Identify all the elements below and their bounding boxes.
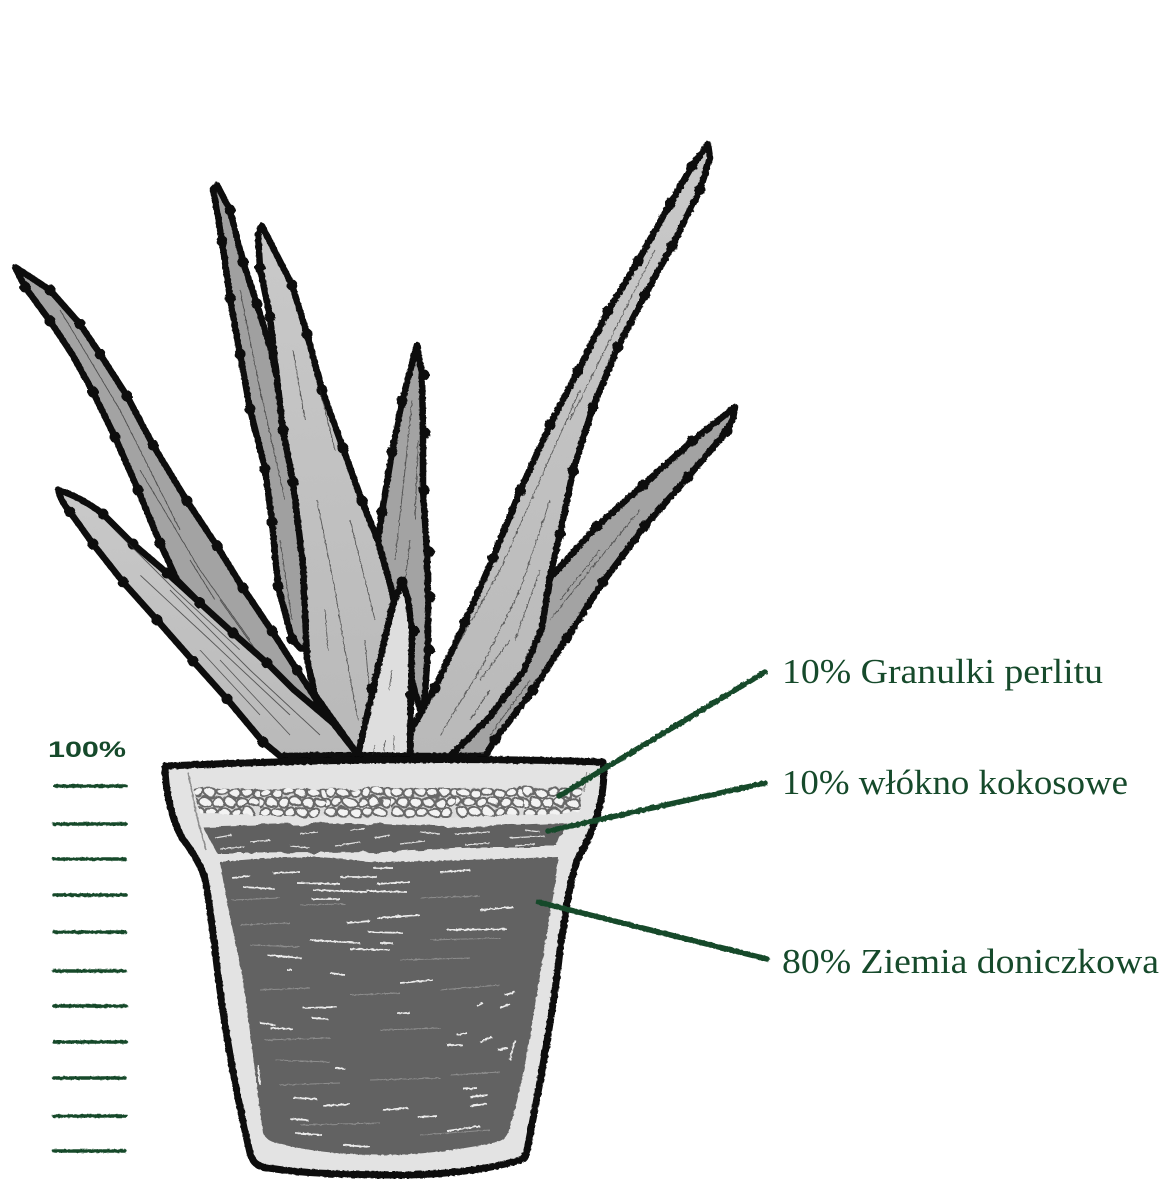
- callout: coconut fibre: 10% włókno kokosowe: [782, 763, 1128, 802]
- leaf: far right back: [450, 407, 735, 756]
- leaf: far left back: [15, 267, 320, 705]
- leaf: lower left front: [58, 490, 358, 756]
- callout: perlite: [559, 652, 1103, 796]
- scale label: 100%: 100%: [48, 737, 126, 762]
- leaf: small front center: [358, 582, 414, 756]
- layer: perlite granules: [193, 787, 583, 818]
- layer: coconut fibre: [203, 823, 567, 853]
- leaf: tall back left: [213, 185, 310, 650]
- pot body: [165, 759, 604, 1175]
- pot: [165, 759, 604, 1175]
- layer: potting soil: [220, 857, 558, 1155]
- aloe plant: [15, 144, 735, 756]
- callout: potting soil: [538, 902, 1159, 981]
- scale ticks: [54, 786, 126, 1151]
- pot inner wall shadow: [188, 772, 587, 850]
- leaf: center back: [378, 345, 430, 720]
- leaf: tall center: [258, 226, 402, 755]
- callout: potting soil: 80% Ziemia doniczkowa: [782, 942, 1159, 981]
- leaf: large right: [407, 144, 710, 756]
- callout: perlite: 10% Granulki perlitu: [782, 652, 1103, 691]
- callout: coconut fibre: [548, 763, 1128, 831]
